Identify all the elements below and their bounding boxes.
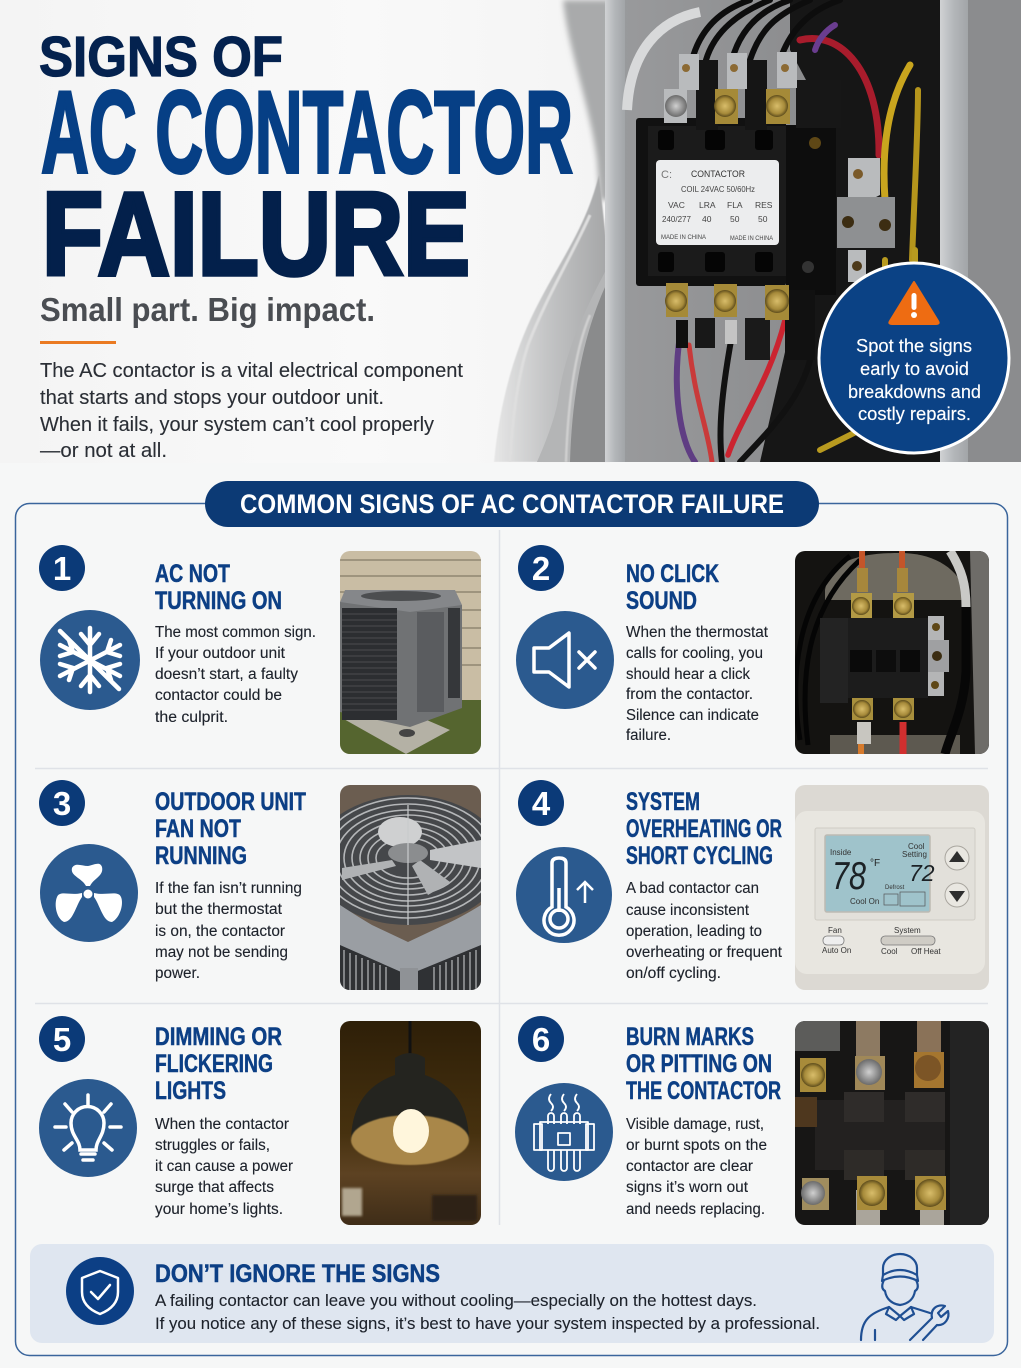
body 2: Silence can indicate (626, 707, 759, 724)
thermostat readings: Inside (830, 848, 852, 857)
body 1: doesn’t start, a faulty (155, 666, 298, 683)
icon: warning triangle (889, 282, 939, 324)
body 1: the culprit. (155, 709, 228, 726)
sign 2: no click sound (516, 545, 989, 754)
callout: spot the signs: breakdowns and (848, 381, 981, 402)
body 5: When the contactor (155, 1116, 289, 1133)
body 6: Visible damage, rust, (626, 1116, 764, 1133)
header photo contactor label: FLA (727, 200, 743, 210)
banner: don't ignore the signs (30, 1244, 994, 1343)
body 3: but the thermostat (155, 901, 283, 918)
header photo contactor label: CONTACTOR (691, 169, 745, 180)
body 4: operation, leading to (626, 923, 762, 940)
banner text: If you notice any of these signs, it’s best to have your system inspected by a professional. (155, 1315, 820, 1333)
subtitle: Small part. Big impact. (40, 291, 375, 328)
icon: technician with wrench (861, 1254, 948, 1340)
title line: failure: FAILURE (42, 168, 470, 300)
number badge 3: 3 (53, 785, 71, 822)
photo: pendant lamp (340, 1021, 481, 1225)
thermostat readings: Off Heat (911, 947, 941, 956)
heading 1: AC NOT (155, 560, 230, 588)
body 2 (626, 624, 769, 744)
heading 2: SOUND (626, 587, 697, 615)
section heading pill: COMMON SIGNS OF AC CONTACTOR FAILURE (240, 489, 784, 519)
number badge 2: 2 (532, 550, 550, 587)
heading 3: RUNNING (155, 842, 247, 870)
callout: spot the signs: Spot the signs (856, 335, 972, 356)
header cables on the left (494, 0, 610, 462)
photo: contactor close-up (795, 551, 989, 754)
body 5: your home’s lights. (155, 1201, 283, 1218)
callout: spot the signs: costly repairs. (858, 403, 971, 424)
body 3: If the fan isn’t running (155, 880, 302, 897)
thermostat readings: 78 (832, 855, 866, 898)
photo: burnt contactor (795, 1021, 989, 1225)
icon: burning contactor (515, 1083, 613, 1181)
number badge 1 (39, 545, 85, 591)
body 4: overheating or frequent (626, 944, 783, 961)
header photo contactor label: 40 (702, 214, 712, 224)
body 4: A bad contactor can (626, 880, 759, 897)
thermostat readings: Auto On (822, 946, 851, 955)
icon: light bulb (39, 1079, 137, 1177)
title (39, 25, 573, 300)
heading 6: THE CONTACTOR (626, 1077, 781, 1105)
body 2: from the contactor. (626, 686, 753, 703)
body 6: contactor are clear (626, 1158, 753, 1175)
header photo contactor label (656, 160, 779, 245)
icon: crossed snowflake (40, 610, 140, 710)
body 1 (155, 624, 316, 726)
icon: fan (40, 844, 138, 942)
heading 4: OVERHEATING OR (626, 815, 782, 843)
heading 6: BURN MARKS (626, 1023, 754, 1051)
body 2: failure. (626, 727, 671, 744)
number badge 3 (39, 780, 85, 826)
body 2: calls for cooling, you (626, 645, 763, 662)
heading 5: DIMMING OR (155, 1023, 282, 1051)
body 4 (626, 880, 783, 982)
body 2: When the thermostat (626, 624, 769, 641)
heading 5: FLICKERING (155, 1050, 273, 1078)
thermostat readings: Cool (908, 842, 925, 851)
body 3: is on, the contactor (155, 923, 285, 940)
heading 4: SYSTEM (626, 788, 700, 816)
intro paragraph: —or not at all. (40, 440, 167, 462)
thermostat readings: Defrost (885, 885, 905, 891)
number badge 6 (518, 1016, 564, 1062)
body 5 (155, 1116, 293, 1218)
body 3 (155, 880, 302, 982)
header photo silver lugs (664, 52, 895, 282)
sign 6: burn marks or pitting (515, 1016, 989, 1225)
heading 6: OR PITTING ON (626, 1050, 772, 1078)
intro paragraph: When it fails, your system can’t cool properly (40, 414, 434, 436)
sign 1: ac not turning on (39, 545, 481, 754)
thermostat readings: Fan (828, 926, 842, 935)
heading 2 (626, 560, 719, 615)
number badge 6: 6 (532, 1021, 550, 1058)
heading 4: SHORT CYCLING (626, 842, 773, 870)
body 5: struggles or fails, (155, 1137, 270, 1154)
body 6: or burnt spots on the (626, 1137, 767, 1154)
header photo contactor body (636, 52, 895, 360)
header photo contactor label: 50 (758, 214, 768, 224)
heading 4 (626, 788, 782, 870)
sign 3: outdoor unit fan not running (39, 780, 503, 990)
thermostat readings: 72 (909, 860, 935, 886)
body 3: power. (155, 965, 200, 982)
header photo: contactor in electrical panel (605, 0, 1021, 463)
icon: thermometer (516, 847, 612, 943)
header photo brass terminals (665, 89, 790, 320)
header photo contactor label: COIL 24VAC 50/60Hz (681, 185, 755, 194)
body 3: may not be sending (155, 944, 288, 961)
icon: muted speaker (516, 611, 614, 709)
thermostat readings: Setting (902, 850, 927, 859)
header photo contactor label: MADE IN CHINA (730, 235, 774, 242)
header background (0, 0, 610, 463)
photo: condenser fan (340, 785, 481, 990)
heading 3: FAN NOT (155, 815, 241, 843)
body 6 (626, 1116, 767, 1218)
heading 5: LIGHTS (155, 1077, 226, 1105)
banner heading: DON’T IGNORE THE SIGNS (155, 1260, 440, 1288)
number badge 4 (518, 780, 564, 826)
intro paragraph: The AC contactor is a vital electrical component (40, 360, 463, 382)
header photo contactor label: 240/277 (662, 215, 691, 224)
body 1: If your outdoor unit (155, 645, 286, 662)
intro paragraph (40, 360, 463, 462)
body 1: The most common sign. (155, 624, 316, 641)
icon: shield check (66, 1257, 134, 1325)
header photo contactor label: RES (755, 200, 773, 210)
photo: outdoor ac unit (340, 551, 481, 754)
body 4: on/off cycling. (626, 965, 721, 982)
body 5: surge that affects (155, 1179, 274, 1196)
intro paragraph: that starts and stops your outdoor unit. (40, 387, 384, 409)
thermostat readings: Cool On (850, 897, 879, 906)
heading 1 (155, 560, 282, 615)
thermostat readings (822, 842, 941, 956)
header photo contactor label: VAC (668, 200, 685, 210)
number badge 5 (39, 1016, 85, 1062)
lower section (14, 481, 1008, 1356)
header section (39, 0, 1021, 462)
heading 1: TURNING ON (155, 587, 282, 615)
header photo contactor label: C: (661, 169, 672, 181)
sign 4: system overheating or short cycling (516, 780, 989, 990)
body 6: signs it’s worn out (626, 1179, 749, 1196)
header photo contactor label: 50 (730, 214, 740, 224)
body 4: cause inconsistent (626, 902, 750, 919)
heading 6 (626, 1023, 781, 1105)
heading 3 (155, 788, 306, 870)
body 1: contactor could be (155, 687, 282, 704)
body 6: and needs replacing. (626, 1201, 765, 1218)
body 2: should hear a click (626, 666, 750, 683)
heading 2: NO CLICK (626, 560, 719, 588)
heading 3: OUTDOOR UNIT (155, 788, 306, 816)
heading 5 (155, 1023, 282, 1105)
thermostat readings: System (894, 926, 921, 935)
header photo wiring (677, 0, 918, 462)
number badge 5: 5 (53, 1021, 71, 1058)
banner text (155, 1292, 820, 1333)
title line: signs of: SIGNS OF (39, 25, 283, 89)
number badge 2 (518, 545, 564, 591)
banner text: A failing contactor can leave you without cooling—especially on the hottest days. (155, 1292, 757, 1310)
header photo contactor label: MADE IN CHINA (661, 234, 707, 241)
sign 5: dimming or flickering lights (39, 1016, 481, 1225)
section heading pill (205, 481, 819, 527)
panel: common signs (16, 504, 1008, 1356)
header photo contactor label: LRA (699, 200, 716, 210)
title line: ac contactor: AC CONTACTOR (41, 66, 573, 198)
number badge 1: 1 (53, 550, 71, 587)
thermostat readings: Cool (881, 947, 898, 956)
photo: thermostat (795, 785, 989, 990)
body 5: it can cause a power (155, 1158, 293, 1175)
orange accent rule (40, 341, 116, 344)
callout: spot the signs: early to avoid (860, 358, 969, 379)
number badge 4: 4 (532, 785, 551, 822)
thermostat readings: °F (870, 858, 880, 869)
callout: spot the signs (819, 263, 1009, 453)
